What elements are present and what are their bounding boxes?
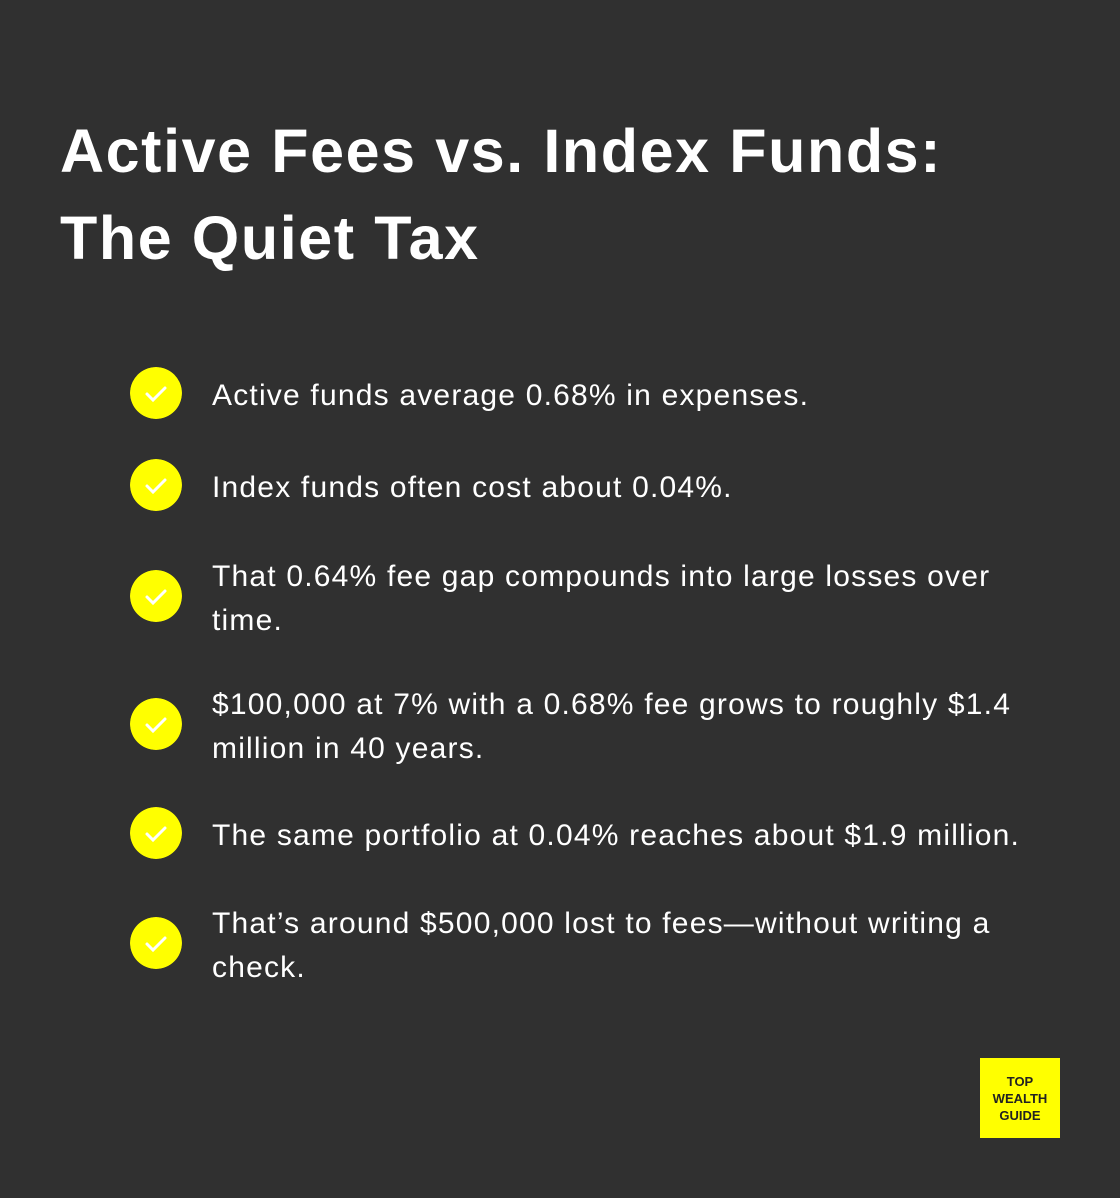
item 5	[130, 807, 1020, 859]
icon: check	[130, 917, 182, 969]
text: Active funds average 0.68% in expenses.	[212, 379, 809, 412]
icon: check	[130, 570, 182, 622]
item 6	[130, 907, 990, 984]
text: $100,000 at 7% with a 0.68% fee grows to roughly $1.4	[212, 688, 1011, 721]
title	[60, 117, 942, 272]
logo: GUIDE	[999, 1108, 1041, 1122]
icon: check	[130, 367, 182, 419]
text: That’s around $500,000 lost to fees—without writing a	[212, 907, 990, 940]
text: Index funds often cost about 0.04%.	[212, 471, 733, 504]
icon: check	[130, 459, 182, 511]
text: That 0.64% fee gap compounds into large losses over	[212, 560, 990, 593]
text: check.	[212, 951, 306, 984]
item 2	[130, 459, 733, 511]
logo: WEALTH	[993, 1090, 1047, 1106]
icon: check	[130, 698, 182, 750]
text: The same portfolio at 0.04% reaches about $1.9 million.	[212, 819, 1020, 852]
logo	[980, 1058, 1060, 1138]
item 1	[130, 367, 809, 419]
text	[212, 560, 990, 637]
text	[212, 907, 990, 984]
text: time.	[212, 604, 283, 637]
text	[212, 688, 1011, 765]
item 3	[130, 560, 990, 637]
icon: check	[130, 807, 182, 859]
item 4	[130, 688, 1011, 765]
logo: TOP	[1007, 1074, 1033, 1088]
text: million in 40 years.	[212, 732, 484, 765]
title: Active Fees vs. Index Funds:	[60, 117, 942, 185]
title: The Quiet Tax	[60, 204, 480, 272]
